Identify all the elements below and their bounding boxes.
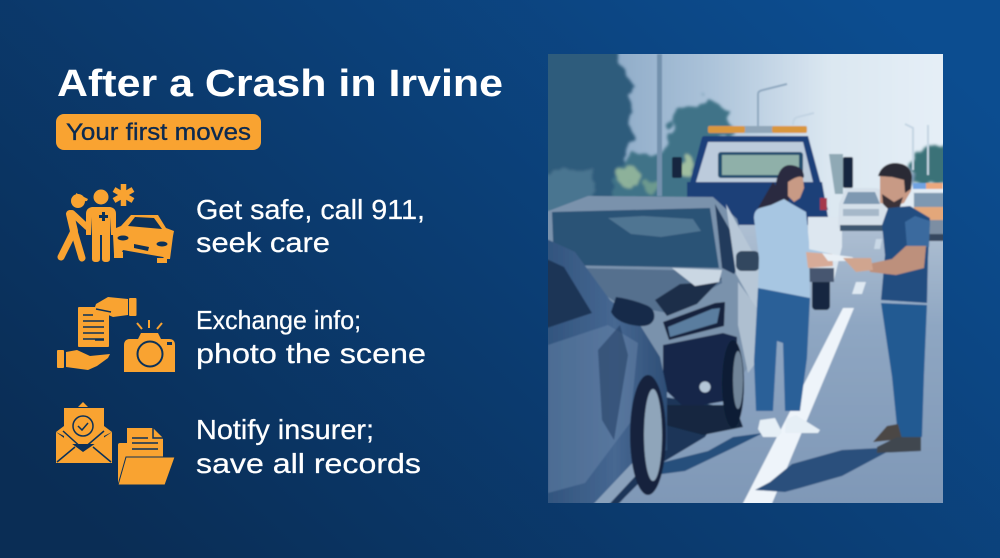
photo: roadside crash scene bbox=[548, 54, 943, 503]
badge: your first moves bbox=[56, 114, 261, 150]
police car bbox=[913, 192, 953, 236]
icon: responders helping at a crashed car bbox=[61, 184, 174, 263]
street poles bbox=[657, 54, 662, 196]
near car in foreground bbox=[548, 239, 668, 503]
step 3 text bbox=[196, 414, 421, 479]
trees bbox=[548, 54, 943, 212]
tow truck bbox=[695, 140, 814, 184]
lane markings bbox=[738, 308, 854, 513]
step 2 text: Exchange info; bbox=[196, 305, 361, 335]
step 3 text: save all records bbox=[196, 448, 421, 479]
woman exchanging documents bbox=[774, 164, 805, 204]
shadows bbox=[755, 448, 887, 492]
step 1 text: Get safe, call 911, bbox=[196, 194, 425, 225]
step 2 text: photo the scene bbox=[196, 338, 426, 369]
badge: your first moves: Your first moves bbox=[66, 119, 251, 146]
step 2 text bbox=[196, 305, 426, 369]
step 3 text: Notify insurer; bbox=[196, 414, 374, 445]
step 1 text bbox=[196, 194, 425, 258]
man exchanging documents bbox=[879, 175, 912, 204]
distant car bbox=[842, 188, 886, 225]
icon: envelope and folder bbox=[56, 402, 175, 485]
document handed between people bbox=[822, 253, 858, 261]
front car with damaged hood bbox=[548, 195, 747, 372]
step 1 text: seek care bbox=[196, 227, 330, 258]
icon: exchanging documents and camera bbox=[57, 297, 175, 372]
title: After a Crash in Irvine bbox=[57, 63, 503, 105]
